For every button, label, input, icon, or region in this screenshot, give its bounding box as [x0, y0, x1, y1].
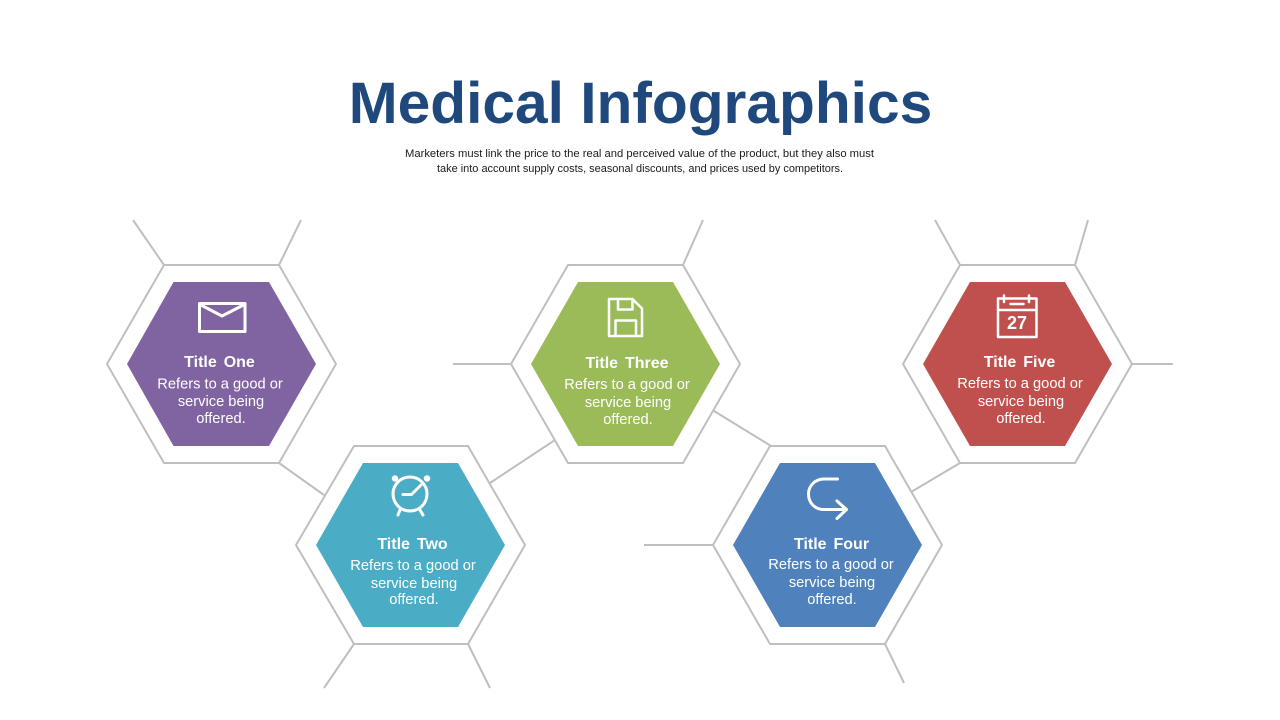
body text three: Refers to a good or	[564, 377, 690, 393]
title: Medical Infographics	[349, 71, 932, 136]
subtitle text block	[405, 148, 874, 175]
icon: calendar	[998, 296, 1036, 337]
body text one: Refers to a good or	[157, 376, 283, 392]
body text five: service being	[978, 394, 1064, 410]
body text four: offered.	[807, 592, 857, 608]
outer hexagon one	[107, 265, 336, 463]
body text five	[957, 376, 1083, 427]
body text two: service being	[371, 576, 457, 592]
teal hexagon	[316, 463, 505, 627]
body text two: offered.	[389, 592, 439, 608]
heading four: Title Four	[794, 536, 869, 553]
body text four: Refers to a good or	[768, 557, 894, 573]
body text one: service being	[178, 394, 264, 410]
icon: envelope	[200, 304, 245, 332]
body text one	[157, 376, 283, 427]
icon: floppy disk	[609, 299, 642, 336]
body text five: offered.	[996, 411, 1046, 427]
body text three: offered.	[603, 412, 653, 428]
body text three: service being	[585, 395, 671, 411]
subtitle text block: Marketers must link the price to the real and perceived value of the product, but they also must	[405, 148, 874, 160]
icon: return arrow	[808, 479, 846, 518]
body text four	[768, 557, 894, 608]
heading five: Title Five	[984, 354, 1055, 371]
body text four: service being	[789, 575, 875, 591]
icon: alarm clock	[392, 476, 430, 515]
panel: title two	[296, 440, 555, 688]
panel: title five	[903, 220, 1173, 463]
outer hexagon five	[903, 265, 1132, 463]
green hexagon	[531, 282, 720, 446]
heading three: Title Three	[585, 355, 669, 372]
connector lines one	[133, 220, 324, 495]
panel: title one	[107, 220, 336, 495]
panel: title three	[453, 220, 771, 463]
connector lines two	[324, 440, 555, 688]
red hexagon	[923, 282, 1112, 446]
body text five: Refers to a good or	[957, 376, 1083, 392]
outer hexagon two	[296, 446, 525, 644]
subtitle text block: take into account supply costs, seasonal discounts, and prices used by competitors.	[437, 163, 843, 175]
body text two: Refers to a good or	[350, 558, 476, 574]
heading one: Title One	[184, 354, 255, 371]
body text three	[564, 377, 690, 428]
purple hexagon	[127, 282, 316, 446]
outer hexagon four	[713, 446, 942, 644]
connector lines four	[644, 463, 960, 683]
connector lines five	[935, 220, 1173, 364]
icon: calendar: 27	[1007, 313, 1027, 333]
body text one: offered.	[196, 411, 246, 427]
heading two: Title Two	[377, 536, 448, 553]
outer hexagon three	[511, 265, 740, 463]
body text two	[350, 558, 476, 608]
blue hexagon	[733, 463, 922, 627]
connector lines three	[453, 220, 771, 446]
panel: title four	[644, 446, 960, 683]
